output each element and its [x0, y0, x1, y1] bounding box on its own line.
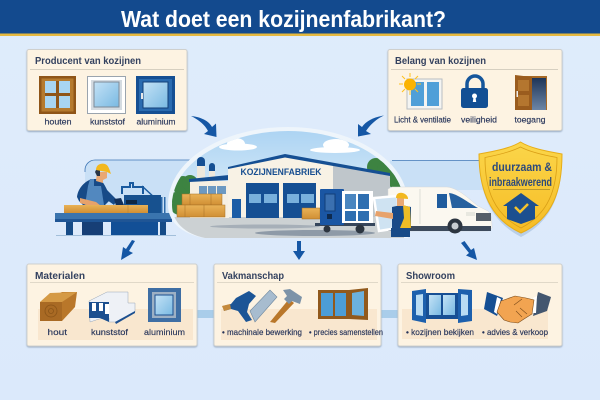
heading: materialen: Materialen	[35, 270, 85, 282]
shield text: duurzaam &	[492, 162, 552, 174]
illustration: aanhanger met kozijn	[315, 189, 375, 234]
label: hout: hout	[48, 327, 68, 337]
label: kunststof: kunststof	[91, 327, 129, 337]
panel: showroom	[398, 264, 562, 346]
label: houten: houten	[44, 116, 72, 126]
schoorstenen	[197, 157, 215, 181]
stapels hout	[177, 194, 320, 219]
heading: producent: Producent van kozijnen	[35, 55, 141, 67]
heading: showroom: Showroom	[406, 270, 455, 282]
background rounded panel behind worker	[85, 160, 190, 213]
label: machinale bewerking: • machinale bewerking	[222, 327, 302, 337]
panel: producent van kozijnen	[27, 50, 187, 130]
icon: gereedschap	[222, 289, 302, 323]
hoofdgebouw	[228, 154, 390, 218]
bomen	[170, 158, 404, 215]
icon: aluminium kozijn	[136, 76, 175, 114]
heading: belang: Belang van kozijnen	[395, 55, 486, 67]
bord: kozijnenfabriek: KOZIJNENFABRIEK	[240, 167, 322, 178]
icon: toegang deur	[515, 75, 547, 110]
werkbank	[55, 213, 176, 236]
gebouw links	[189, 175, 229, 218]
icon: kunststof kozijn	[88, 76, 126, 114]
label: toegang: toegang	[514, 114, 546, 124]
illustration: bestelbus	[388, 187, 492, 234]
label: kunststof: kunststof	[90, 116, 126, 126]
werker	[77, 164, 124, 235]
shield: duurzaam en inbraakwerend	[479, 142, 562, 237]
heading: vakmanschap: Vakmanschap	[222, 270, 284, 282]
icon: hout	[40, 292, 77, 321]
icon: showroom kozijn	[412, 289, 472, 323]
arrow: naar vakmanschap	[293, 241, 305, 260]
icon: kunststof profiel	[89, 292, 135, 324]
icon: licht en ventilatie	[399, 73, 442, 109]
arrow: naar materialen	[121, 240, 135, 260]
illustration: werker met kozijn	[374, 193, 411, 237]
label: veiligheid: veiligheid	[461, 114, 497, 124]
vignette: fabriek	[168, 127, 408, 238]
label: precies samenstellen: • precies samenstellen	[309, 327, 383, 337]
label: kozijnen bekijken: • kozijnen bekijken	[406, 327, 474, 337]
arrow: naar showroom	[461, 241, 477, 260]
arrow: producent naar fabriek	[191, 116, 216, 137]
label: aluminium: aluminium	[136, 116, 176, 126]
label: advies en verkoop: • advies & verkoop	[482, 327, 548, 337]
label: licht en ventilatie: Licht & ventilatie	[394, 114, 451, 124]
shield: duurzaam en inbraakwerend: inbraakwerend	[489, 177, 552, 189]
panel: belang van kozijnen	[388, 50, 562, 130]
panel: vakmanschap	[214, 264, 383, 346]
icon: aluminium raam	[148, 288, 181, 322]
icon: handdruk	[484, 292, 551, 323]
grond	[174, 217, 404, 238]
title banner: Wat doet een kozijnenfabrikant?	[121, 6, 446, 32]
title banner	[0, 0, 600, 36]
panel: materialen	[27, 264, 197, 346]
icon: houten kozijn	[39, 76, 76, 114]
icon: veiligheid slot	[461, 76, 488, 108]
illustration: werker aan machine	[55, 164, 176, 236]
label: aluminium: aluminium	[144, 327, 185, 337]
icon: huis met vinkje	[503, 193, 539, 224]
connector bars	[197, 310, 399, 318]
houten plank	[64, 205, 148, 213]
wolken	[219, 138, 360, 153]
machine	[122, 183, 166, 213]
icon: samengesteld kozijn	[318, 288, 368, 320]
arrow: belang naar fabriek	[358, 116, 384, 136]
